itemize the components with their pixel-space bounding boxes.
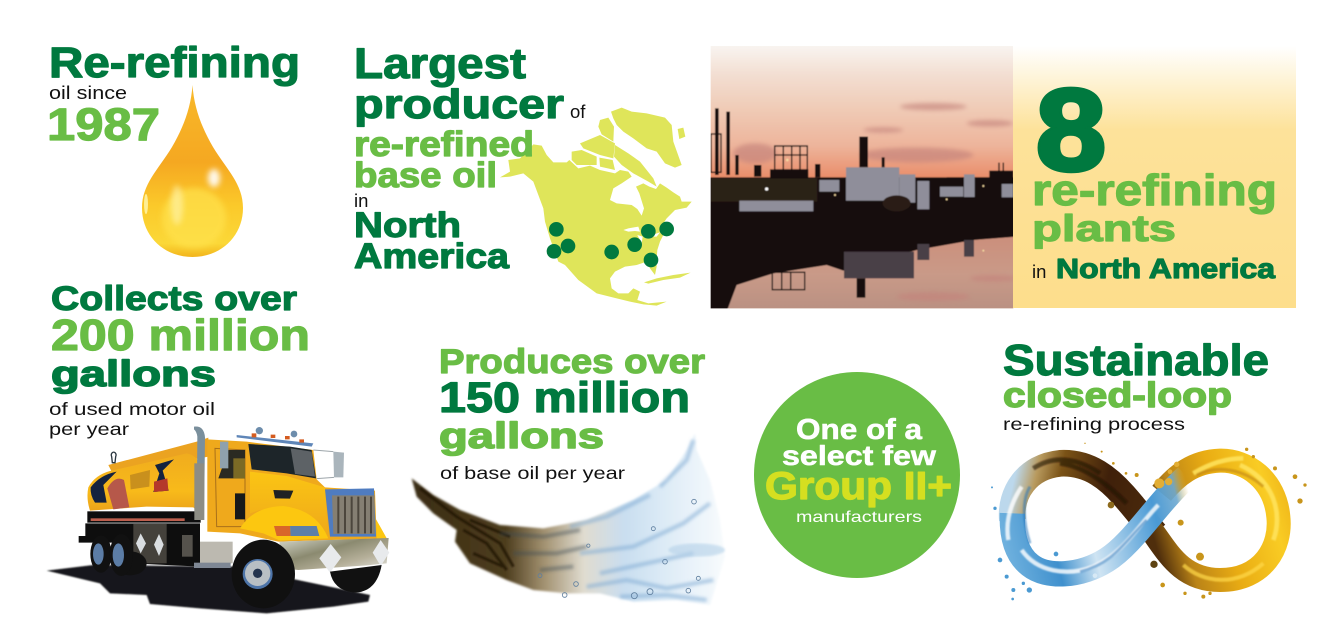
heading: re-refining oil since 1987	[47, 39, 300, 150]
text: re-refined base oil in North America	[354, 125, 534, 276]
panel: 8 re-refining plants: North America	[1056, 253, 1275, 284]
text: produces over 150 million gallons: of base oil per year	[440, 463, 625, 483]
bumper	[279, 538, 389, 570]
tank	[87, 438, 208, 517]
text: re-refined base oil in North America: America	[354, 237, 510, 276]
panel: 8 re-refining plants	[1013, 46, 1296, 308]
number: 8: 8	[1036, 65, 1106, 195]
text: re-refined base oil in North America: in	[354, 190, 368, 211]
text: produces over 150 million gallons	[439, 343, 705, 483]
heading: largest producer: Largest	[354, 40, 526, 88]
wheels	[90, 534, 295, 608]
panel: 8 re-refining plants: plants	[1032, 208, 1176, 249]
heading: re-refining oil since 1987: 1987	[47, 99, 160, 150]
text: re-refined base oil in North America: North	[354, 206, 461, 245]
illustration: infinity loop of oil and water	[991, 443, 1307, 600]
cab	[207, 427, 387, 542]
text: sustainable closed-loop: re-refining process	[1003, 414, 1185, 434]
text: collects over 200 million gallons: of used motor oil	[49, 399, 215, 419]
heading: re-refining oil since 1987: Re-refining	[49, 39, 300, 87]
illustration: oil turning to water wave	[412, 433, 725, 605]
badge: Group II+ manufacturers: manufacturers	[796, 509, 922, 526]
heading: largest producer: producer	[354, 81, 564, 127]
badge: Group II+ manufacturers: Group II+	[765, 465, 952, 508]
plant location dots	[547, 222, 674, 267]
heading: largest producer	[354, 40, 586, 127]
text: collects over 200 million gallons: gallons	[51, 353, 216, 394]
illustration: tanker truck	[47, 427, 389, 613]
text: sustainable closed-loop	[1003, 336, 1269, 434]
heading: largest producer: of	[570, 101, 586, 122]
text: collects over 200 million gallons: per year	[49, 419, 129, 439]
icon: oil drop	[142, 85, 243, 257]
badge: Group II+ manufacturers: One of a	[796, 414, 923, 446]
text: sustainable closed-loop: closed-loop	[1003, 376, 1232, 415]
map: North America with plant locations	[500, 108, 692, 306]
exhaust stack	[194, 427, 205, 520]
panel: 8 re-refining plants: in	[1032, 261, 1046, 282]
panel: 8 re-refining plants: re-refining	[1032, 166, 1277, 215]
heading: re-refining oil since 1987: oil since	[49, 83, 127, 103]
text: re-refined base oil in North America: base oil	[354, 156, 497, 195]
photo: refinery at sunset	[707, 43, 1017, 312]
text: re-refined base oil in North America: re-refined	[354, 125, 534, 164]
chassis	[79, 511, 233, 568]
text: collects over 200 million gallons	[49, 280, 310, 439]
text: collects over 200 million gallons: 200 million	[51, 311, 310, 360]
text: sustainable closed-loop: Sustainable	[1003, 336, 1269, 385]
text: collects over 200 million gallons: Collects over	[51, 280, 297, 318]
badge: Group II+ manufacturers: select few	[782, 440, 936, 471]
text: produces over 150 million gallons: 150 million	[439, 374, 690, 422]
badge: Group II+ manufacturers	[754, 372, 960, 578]
text: produces over 150 million gallons: gallons	[439, 415, 604, 456]
text: produces over 150 million gallons: Produces over	[439, 343, 705, 381]
